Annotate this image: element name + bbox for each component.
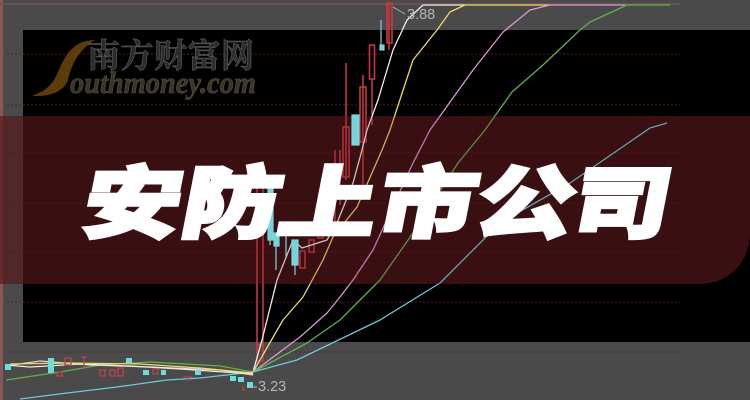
- line: white MA: [253, 5, 465, 372]
- title: 安防上市公司: 上: [272, 160, 387, 248]
- title: 安防上市公司: 安: [76, 160, 191, 248]
- title: 安防上市公司: 公: [469, 160, 584, 248]
- line: blue MA: [20, 123, 667, 399]
- title: 安防上市公司: 司: [565, 160, 680, 248]
- band tint over lines: [0, 116, 750, 284]
- title band: translucent dark red: [0, 116, 750, 284]
- logo swoosh: [32, 40, 95, 96]
- logo Chinese name: 南方财富网: [87, 30, 254, 77]
- left edge stripe: [0, 0, 3, 400]
- label: high price: 3.88: [407, 7, 435, 23]
- watermark logo: southmoney: [32, 30, 256, 100]
- title: 安防上市公司: [76, 160, 680, 248]
- line: yellow MA: [253, 5, 550, 372]
- short lines: [5, 361, 253, 375]
- candlestick chart: rally section: [257, 3, 392, 361]
- line: pink MA: [253, 5, 625, 372]
- label: low price: 3.23: [258, 379, 286, 395]
- label: high price: [393, 7, 435, 23]
- top edge stripe: [0, 3, 680, 5]
- title: 安防上市公司: 防: [175, 160, 290, 248]
- consolidation section: small candles and short lines: [5, 357, 253, 390]
- chart area: black panel: [23, 30, 750, 342]
- logo domain text: outhmoney.com: [70, 65, 256, 100]
- candlestick chart: falling candles: [268, 20, 384, 275]
- small red candles: [57, 357, 245, 390]
- title: 安防上市公司: 市: [371, 160, 486, 248]
- small cyan candles: [5, 358, 253, 388]
